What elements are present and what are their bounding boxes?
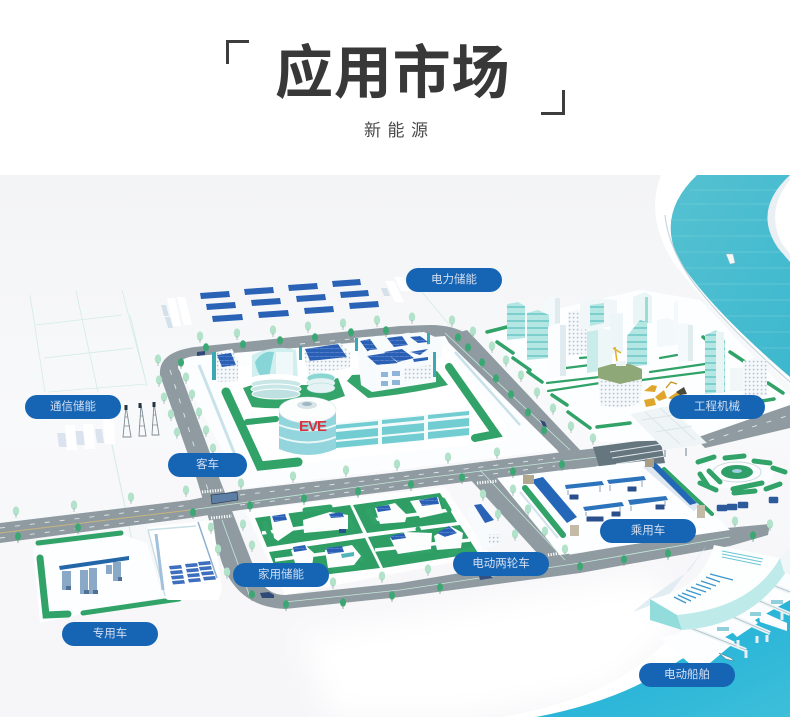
construction building bbox=[598, 347, 642, 408]
road east bbox=[695, 405, 790, 448]
top-left bracket bbox=[226, 40, 249, 64]
bright ground patch bbox=[300, 575, 680, 717]
EVE logo: EVE bbox=[299, 418, 327, 435]
label: 通信储能: 通信储能 bbox=[50, 401, 96, 413]
label: 专用车: 专用车 bbox=[93, 628, 127, 640]
solar farm utility buildings bbox=[161, 277, 410, 328]
round glass building bbox=[251, 348, 335, 399]
white paths bbox=[262, 510, 470, 560]
label: 电力储能 bbox=[406, 268, 502, 292]
upper water bbox=[655, 175, 790, 385]
subtitle: 新能源 bbox=[364, 121, 434, 140]
bottom-right bracket bbox=[541, 90, 565, 115]
solar farm bbox=[200, 279, 379, 322]
label: 电动两轮车 bbox=[453, 552, 549, 576]
label: 通信储能 bbox=[25, 395, 121, 419]
label: 电动船舶: 电动船舶 bbox=[664, 669, 710, 681]
houses bbox=[270, 512, 294, 541]
crosswalks bbox=[202, 481, 562, 555]
road branch bbox=[458, 462, 575, 565]
boat bbox=[726, 254, 735, 264]
label: 专用车 bbox=[62, 622, 158, 646]
building small left bbox=[212, 349, 238, 382]
power lines field bbox=[30, 290, 452, 545]
road main bbox=[0, 443, 640, 543]
mid office with solar bbox=[299, 343, 350, 374]
shrubs bbox=[265, 500, 472, 569]
city hedges bbox=[487, 327, 783, 428]
house block bbox=[245, 487, 490, 595]
city towers bbox=[507, 292, 767, 398]
excavators bbox=[644, 382, 687, 407]
label: 乘用车: 乘用车 bbox=[631, 525, 665, 537]
label: 电动船舶 bbox=[639, 663, 735, 687]
solar warehouse bbox=[148, 520, 222, 600]
road ring bbox=[0, 325, 790, 609]
label: 电动两轮车: 电动两轮车 bbox=[472, 558, 530, 570]
road diagonal bbox=[443, 330, 600, 473]
label: 客车 bbox=[168, 453, 247, 477]
piers bbox=[660, 570, 790, 664]
title heading: 应用市场 bbox=[275, 41, 510, 106]
back building with solar bbox=[354, 332, 442, 364]
vehicles on roads bbox=[197, 351, 547, 598]
label: 客车: 客车 bbox=[196, 459, 219, 471]
ferry terminal bbox=[633, 545, 790, 664]
big office with solar bbox=[358, 344, 436, 392]
EVE round building bbox=[279, 397, 336, 455]
tunnel bbox=[593, 438, 665, 470]
long building bbox=[335, 393, 470, 449]
plaza bbox=[698, 456, 785, 510]
central block platform bbox=[178, 336, 557, 488]
special vehicle yard bbox=[33, 533, 179, 623]
lower water bbox=[500, 560, 790, 717]
gas station bbox=[465, 504, 501, 551]
hedges central bbox=[226, 367, 496, 466]
label: 电力储能: 电力储能 bbox=[431, 274, 477, 286]
telecom white bars and towers bbox=[57, 402, 159, 450]
green pads bbox=[243, 371, 448, 408]
passenger car block bbox=[497, 459, 730, 555]
city block base bbox=[488, 290, 790, 442]
terminal roof bbox=[650, 545, 780, 615]
ground bbox=[0, 175, 790, 717]
trees bbox=[13, 312, 773, 611]
label: 家用储能 bbox=[233, 563, 329, 587]
label: 工程机械: 工程机械 bbox=[694, 401, 740, 413]
label: 工程机械 bbox=[669, 395, 765, 419]
canopy station bbox=[630, 406, 707, 457]
label: 乘用车 bbox=[600, 519, 696, 543]
label: 家用储能: 家用储能 bbox=[258, 569, 304, 581]
